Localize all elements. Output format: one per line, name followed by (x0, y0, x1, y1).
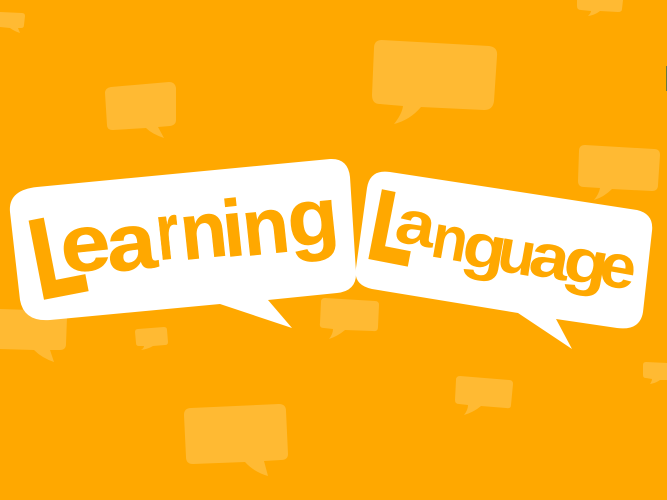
word: Learning (21, 171, 343, 321)
word: Language: g (559, 225, 615, 300)
word: Learning: a (101, 195, 161, 289)
bubble: bottom centre (184, 404, 288, 476)
bubble: top centre (372, 40, 497, 124)
bubble: right edge small (643, 362, 667, 384)
word: Language: L (362, 171, 425, 284)
word: Language: e (595, 229, 642, 304)
bubble: top right corner (577, 0, 623, 16)
word: Learning: n (175, 183, 231, 277)
word: Language: u (493, 216, 542, 290)
bubble: right (578, 145, 660, 200)
word: Language: a (391, 187, 442, 262)
bubble: top left corner (0, 12, 25, 33)
bubble: tiny left (135, 327, 168, 350)
bubble: lower left edge (0, 309, 67, 362)
word: Learning: n (237, 179, 293, 273)
word: Learning: g (283, 171, 343, 264)
bubble: lower right (455, 376, 513, 415)
word: Language (362, 171, 642, 304)
word: Learning: e (55, 196, 114, 290)
speech bubble: Language (356, 171, 652, 349)
word: Language: n (427, 200, 474, 275)
bubble: centre small (320, 298, 379, 339)
speech bubble: Learning (10, 159, 356, 328)
bubble: upper left (105, 82, 176, 138)
word: Learning: i (217, 183, 249, 274)
word: Language: g (458, 210, 512, 285)
word: Learning: L (21, 190, 93, 321)
word: Language: a (525, 220, 576, 295)
word: Learning: r (151, 186, 183, 277)
